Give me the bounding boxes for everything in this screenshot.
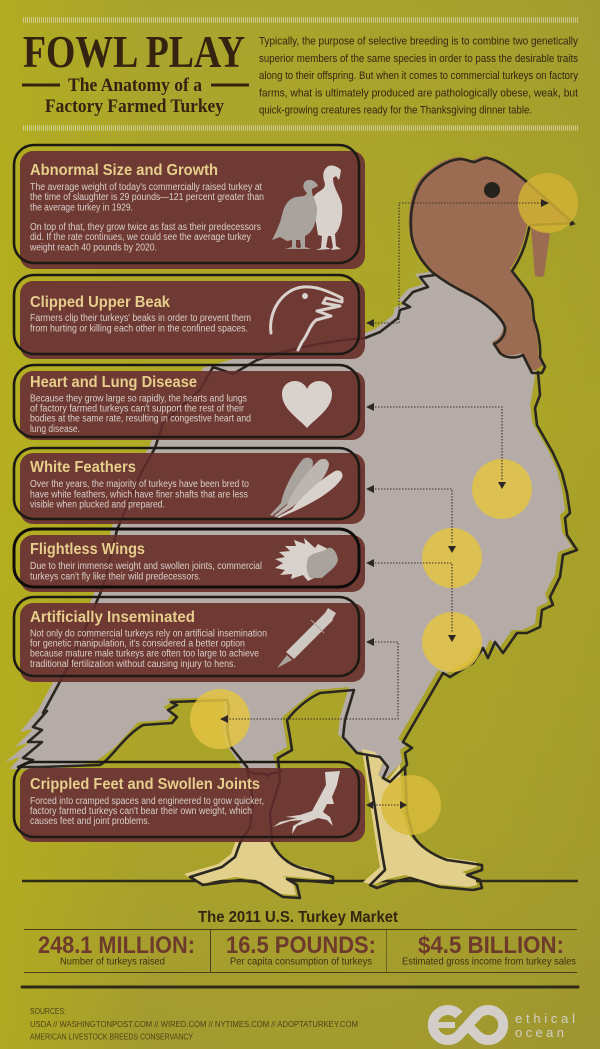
intro paragraph	[259, 36, 579, 116]
stat: gross income	[402, 932, 576, 968]
arrow: feet	[373, 804, 400, 806]
arrow: heart	[375, 407, 502, 480]
panel: Clipped Upper Beak	[14, 275, 359, 354]
panel: Flightless Wings	[14, 529, 359, 587]
ground line	[22, 880, 578, 882]
subtitle	[22, 76, 249, 117]
panel: Artificially Inseminated: traditional fertilization without causing injury to hens.	[30, 659, 236, 670]
panel: Abnormal Size and Growth: the time of slaughter is 29 pounds—121 percent greater than	[30, 192, 264, 203]
arrow: feathers	[375, 489, 452, 544]
panel: Abnormal Size and Growth: did. If the rate continues, we could see the average turkey	[30, 232, 251, 243]
panel: Clipped Upper Beak: Clipped Upper Beak	[30, 294, 170, 311]
panel: Flightless Wings: turkeys can't fly like their wild predecessors.	[30, 572, 201, 582]
panel: Artificially Inseminated: Not only do commercial turkeys rely on artificial insemination	[30, 628, 267, 640]
stat: per capita: 16.5 POUNDS:	[226, 932, 376, 959]
icon: syringe	[277, 608, 336, 668]
header: title and intro	[22, 20, 579, 128]
panel: Crippled Feet and Swollen Joints: Forced into cramped spaces and engineered to grow quicker,	[30, 796, 264, 807]
subtitle: Factory Farmed Turkey	[45, 97, 225, 117]
icon: feathers	[270, 458, 343, 518]
arrowheads	[220, 199, 576, 809]
panel: Abnormal Size and Growth	[14, 145, 359, 263]
panel: Heart and Lung Disease: lung disease.	[30, 424, 80, 435]
dotted connector arrows	[229, 203, 541, 805]
eye	[484, 182, 500, 198]
panel: White Feathers: have white feathers, which have finer shafts that are less	[30, 490, 248, 500]
arrow: insemination	[229, 642, 398, 719]
panel: Artificially Inseminated: Artificially Inseminated	[30, 609, 195, 626]
left foot fill	[184, 772, 329, 895]
panel: Heart and Lung Disease: Heart and Lung Disease	[30, 374, 197, 391]
arrow: beak	[375, 203, 541, 323]
logo: ethical ocean: ethical	[515, 1011, 575, 1026]
panel: White Feathers: White Feathers	[30, 459, 136, 476]
panel: Abnormal Size and Growth: On top of that, they grow twice as fast as their predecessors	[30, 222, 261, 233]
icon: wing	[275, 538, 338, 581]
panel: Crippled Feet and Swollen Joints: Crippled Feet and Swollen Joints	[30, 776, 260, 793]
market heading: The 2011 U.S. Turkey Market	[198, 909, 399, 926]
panel: Heart and Lung Disease: Because they grow large so rapidly, the hearts and lungs	[30, 394, 247, 404]
turkey outline ghost through cards	[58, 337, 365, 842]
panel: Flightless Wings: Flightless Wings	[30, 541, 145, 558]
sources	[30, 1007, 358, 1042]
subtitle: The Anatomy of a	[68, 76, 202, 96]
sources: AMERICAN LIVESTOCK BREEDS CONSERVANCY	[30, 1032, 194, 1042]
panel: Crippled Feet and Swollen Joints	[14, 762, 359, 837]
divider	[22, 986, 578, 988]
panel: Crippled Feet and Swollen Joints: factory farmed turkeys can't bear their own weight, which	[30, 806, 252, 817]
panel: Flightless Wings: Due to their immense weight and swollen joints, commercial	[30, 561, 262, 572]
right foot fill	[362, 749, 477, 887]
panel: Heart and Lung Disease: bodies at the same rate, resulting in congestive heart and	[30, 414, 251, 424]
icon: heart	[282, 381, 332, 428]
logo: ethical ocean	[432, 1010, 575, 1040]
intro paragraph: quick-growing creatures ready for the Thanksgiving dinner table.	[259, 104, 532, 116]
panel: Clipped Upper Beak: from hurting or killing each other in the confined spaces.	[30, 324, 248, 334]
panel: White Feathers: visible when plucked and prepared.	[30, 500, 165, 510]
turkey outline	[18, 158, 577, 898]
sources: SOURCES:	[30, 1007, 66, 1016]
wattle	[531, 227, 550, 277]
panel: Artificially Inseminated: because mature male turkeys are often too large to achieve	[30, 648, 259, 660]
panel: Heart and Lung Disease	[14, 365, 359, 437]
icon: turkey foot	[273, 771, 340, 834]
icon: clipped beak head	[271, 287, 342, 350]
stat: gross income: Estimated gross income from turkey sales	[402, 956, 576, 968]
turkey illustration	[5, 156, 577, 898]
panel: Abnormal Size and Growth: The average weight of today's commercially raised turkey at	[30, 182, 262, 193]
card backgrounds	[20, 151, 365, 842]
logo: ethical ocean: ocean	[515, 1025, 564, 1040]
arrow: wings	[375, 563, 452, 633]
icon: two turkeys	[272, 166, 342, 250]
panel: White Feathers: Over the years, the majority of turkeys have been bred to	[30, 479, 249, 490]
stat: turkeys raised: 248.1 MILLION:	[38, 932, 195, 959]
panel: Abnormal Size and Growth: the average turkey in 1929.	[30, 202, 133, 214]
panel: Artificially Inseminated: for genetic manipulation, it's considered a better option	[30, 638, 245, 650]
stat: per capita: Per capita consumption of turkeys	[230, 956, 372, 968]
stat: turkeys raised: Number of turkeys raised	[60, 956, 165, 968]
panel: Abnormal Size and Growth: Abnormal Size and Growth	[30, 162, 218, 179]
highlight circles	[190, 173, 578, 835]
market statistics	[24, 909, 577, 972]
panel: Heart and Lung Disease: of factory farmed turkeys can't support the rest of their	[30, 404, 245, 414]
turkey head and neck fill	[409, 156, 571, 371]
panel: Artificially Inseminated	[14, 597, 359, 676]
turkey body fill	[5, 269, 572, 779]
panel: Clipped Upper Beak: Farmers clip their turkeys' beaks in order to prevent them	[30, 313, 251, 324]
panel: Crippled Feet and Swollen Joints: causes feet and joint problems.	[30, 816, 150, 827]
sources: USDA // WASHINGTONPOST.COM // WIRED.COM // NYTIMES.COM // ADOPTATURKEY.COM	[30, 1020, 358, 1029]
stat: gross income: $4.5 BILLION:	[418, 932, 564, 959]
panel: Abnormal Size and Growth: weight reach 40 pounds by 2020.	[29, 242, 157, 254]
panel: White Feathers	[14, 448, 359, 519]
title: FOWL PLAY	[23, 27, 245, 77]
